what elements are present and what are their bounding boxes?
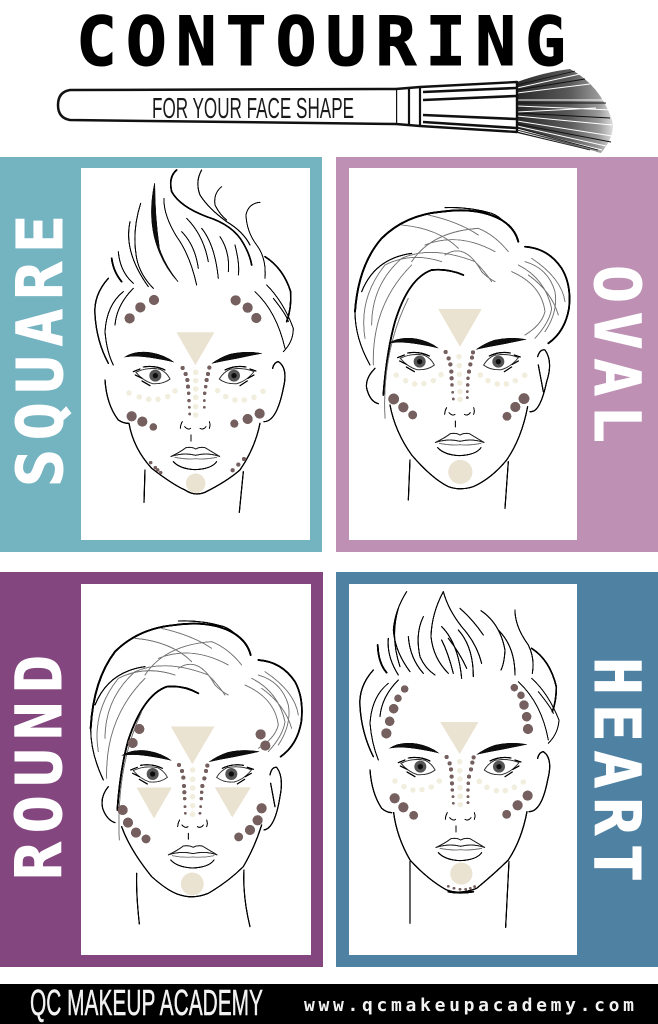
subtitle: FOR YOUR FACE SHAPE — [152, 93, 354, 125]
contour marks — [388, 309, 529, 484]
hair — [355, 208, 570, 418]
brush bristles — [517, 69, 613, 153]
title: CONTOURING — [76, 3, 566, 82]
face: oval — [355, 208, 570, 508]
panel: round — [0, 572, 323, 967]
face: square — [95, 170, 293, 512]
hair — [360, 592, 559, 760]
face outline — [105, 362, 285, 512]
panel: square — [0, 157, 322, 552]
face outline — [102, 767, 281, 927]
heading: square: SQUARE — [4, 215, 77, 487]
contour marks — [125, 295, 266, 493]
face: round — [91, 621, 302, 927]
hair — [95, 170, 293, 365]
heading: round: ROUND — [3, 655, 76, 880]
footer website: www.qcmakeupacademy.com — [304, 995, 634, 1016]
brush handle — [58, 89, 396, 124]
contour marks — [381, 684, 533, 891]
panel: oval — [336, 157, 658, 552]
icon: makeup brush with subtitle — [58, 69, 613, 153]
face: heart — [360, 592, 559, 927]
heading: heart: HEART — [580, 657, 653, 882]
brush ferrule — [396, 82, 517, 132]
face outline — [370, 752, 550, 927]
footer bar — [0, 982, 658, 1024]
contour marks — [118, 724, 270, 895]
footer brand: QC MAKEUP ACADEMY — [30, 982, 263, 1023]
face outline — [366, 350, 550, 508]
heading: oval: OVAL — [580, 265, 653, 443]
panel: heart — [336, 572, 658, 967]
hair — [91, 621, 302, 840]
